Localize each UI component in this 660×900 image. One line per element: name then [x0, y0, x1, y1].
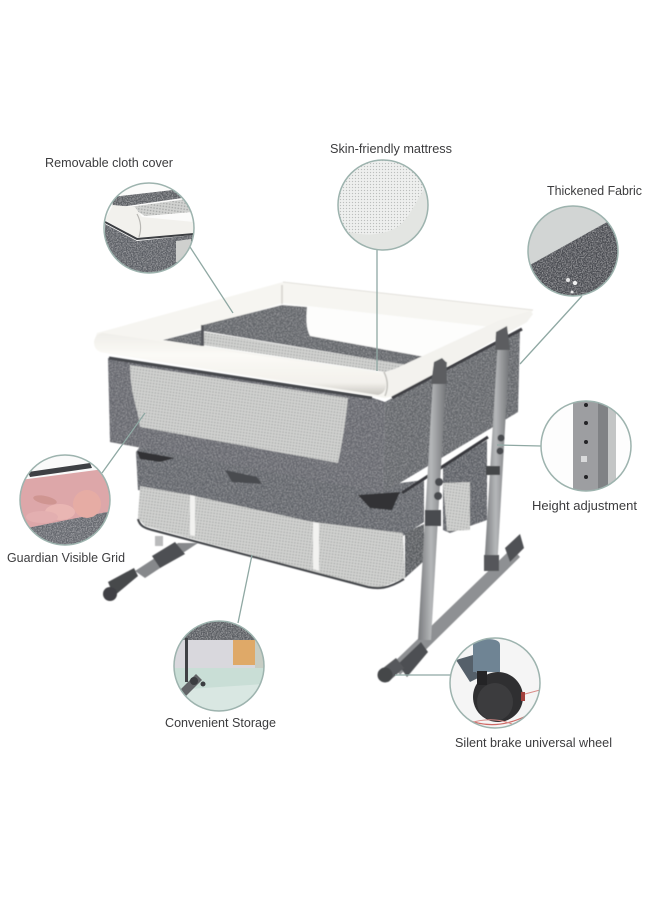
label: height adjustment: Height adjustment [532, 499, 638, 513]
front right leg and base [378, 358, 447, 682]
rim base with opening [94, 282, 533, 398]
label: skin-friendly mattress: Skin-friendly mattress [330, 142, 452, 156]
lower storage basket [136, 440, 424, 588]
label: guardian visible grid: Guardian Visible Grid [7, 551, 125, 565]
leader lines [102, 247, 582, 675]
label: silent brake universal wheel: Silent brake universal wheel [455, 736, 612, 750]
circle: thickened fabric detail [528, 206, 620, 300]
front fabric face [108, 358, 385, 493]
circle: guardian visible grid detail [20, 455, 112, 545]
right rail [386, 311, 533, 396]
circle: removable cloth cover detail [103, 182, 195, 274]
bedside crib illustration [94, 282, 533, 682]
circle: silent brake universal wheel detail [450, 638, 540, 728]
right fabric face [383, 330, 520, 493]
front mesh window [130, 365, 348, 463]
rear storage basket [443, 440, 487, 533]
upper bassinet body [94, 282, 533, 493]
label: removable cloth cover: Removable cloth cover [45, 156, 173, 170]
circle: height adjustment detail [540, 400, 632, 492]
right base bar [392, 534, 524, 675]
circle: skin-friendly mattress detail [338, 160, 428, 250]
rear right leg [484, 326, 510, 571]
circle: convenient storage detail [174, 620, 265, 712]
left base with wheel [103, 536, 198, 601]
label: convenient storage: Convenient Storage [165, 716, 276, 730]
front rail [94, 333, 386, 395]
zipper edges [109, 358, 372, 398]
label: thickened fabric: Thickened Fabric [547, 184, 642, 198]
